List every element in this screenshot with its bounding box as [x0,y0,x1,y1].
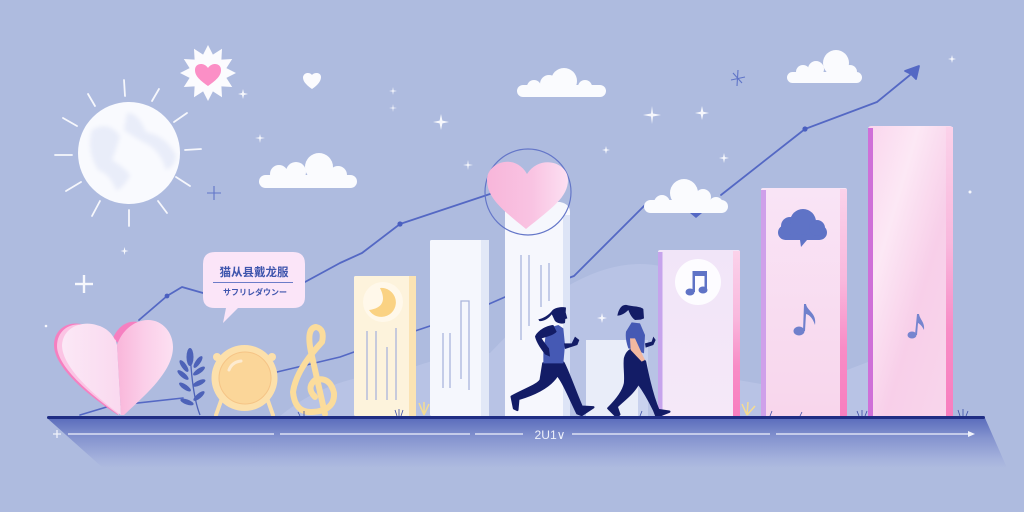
bar 1: yellow with moon icon [354,276,416,416]
speech bubble: サフリレダウンー [223,287,287,297]
icon: moon with rays [55,80,201,226]
runner 2 [608,305,669,417]
icon: small white heart [303,73,321,89]
icon: leaf sprig [176,348,206,415]
icon: small eighth note [908,314,924,338]
icon: round gold clock [212,345,278,415]
speech bubble [203,252,305,323]
ground line [47,416,985,419]
icon: treble clef [293,327,334,414]
background hills [280,264,868,416]
icon: cloud [778,209,827,247]
sparkles [45,55,971,327]
runner 1 [512,307,593,415]
icon: large heart with ring [485,149,571,235]
small back bar [586,340,648,416]
bar 6: tallest, note [868,126,953,416]
cloud left [259,153,357,188]
blue sparkles [207,70,745,200]
icon: sun with pink heart [180,45,236,101]
timeline axis with arrow and label [53,428,975,442]
ground shadow [47,418,1007,468]
speech bubble: 猫从县戴龙服 [220,265,289,279]
cloud over bars [644,179,728,218]
trend line lower segment [80,297,505,415]
cloud top right [787,50,862,83]
icon: paper heart [54,320,173,415]
icon: eighth note [794,304,815,336]
timeline axis with arrow and label: 2U1∨ [534,428,566,442]
bar 2: white [430,240,489,416]
trend line upper segment with arrow [139,66,919,320]
icon: double music note [686,271,708,296]
bar 5: cloud and note [761,188,847,416]
cloud top centre [517,68,606,97]
grass tufts [419,402,755,415]
bar 4: music note [658,250,740,416]
bar 3: tall white [505,202,570,416]
